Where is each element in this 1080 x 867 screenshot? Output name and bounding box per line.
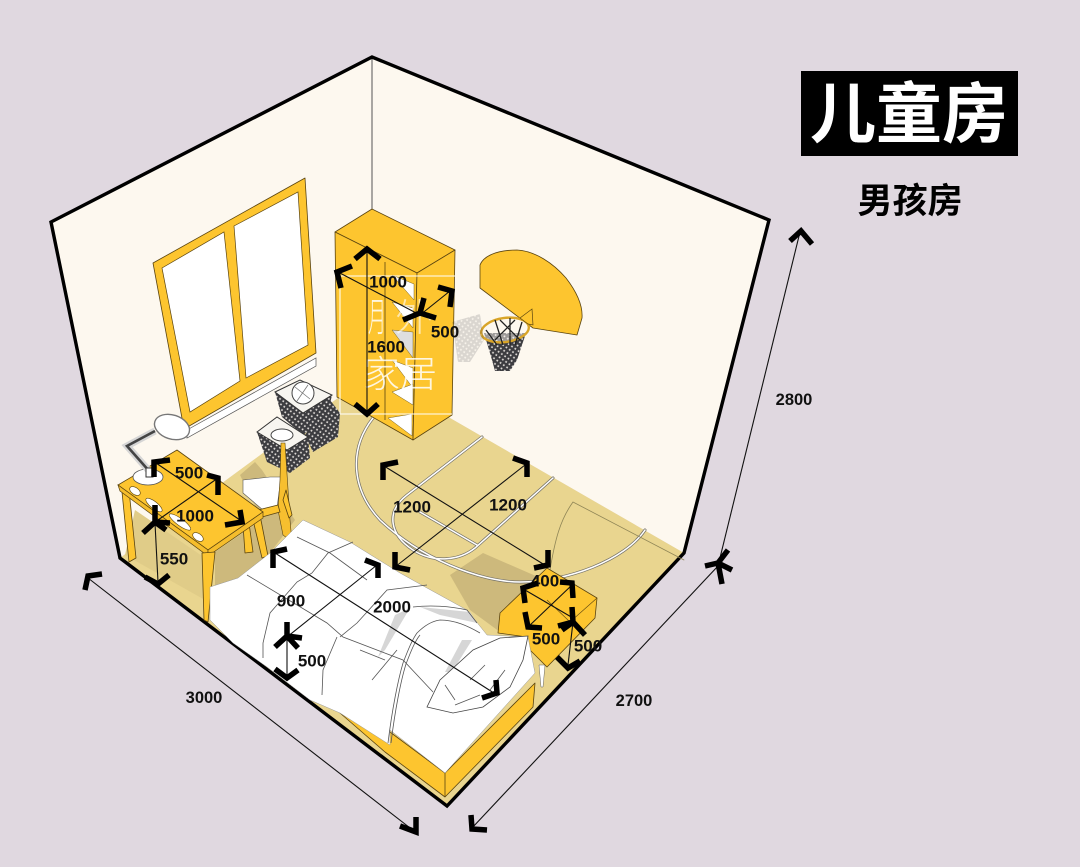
left wall (51, 57, 372, 558)
duvet folds (247, 537, 480, 743)
nightstand (498, 568, 597, 687)
dimension: bed width 900 (277, 560, 378, 637)
dimension: desk width 1000: 1000 (176, 506, 214, 526)
title: 儿童房 (810, 77, 1008, 151)
watermark: 外 (395, 298, 433, 340)
floor court lines (356, 418, 684, 582)
dimension: bed length 2000: 2000 (373, 598, 411, 616)
dimension: wardrobe depth 500 (403, 287, 459, 342)
hoop ghost shadow (452, 314, 484, 362)
dimension: wardrobe depth 500: 500 (431, 322, 459, 342)
icon: desk lamp (127, 410, 193, 485)
floor (120, 373, 684, 806)
dimension: bed height 500 (275, 622, 326, 678)
duvet shadows (378, 607, 477, 672)
dimension: room 2700 (471, 566, 718, 830)
dimension: rug length 1200 (383, 462, 548, 568)
dimension: rug length 1200: 1200 (393, 498, 431, 516)
room back corner line (371, 57, 373, 212)
desk (118, 450, 268, 622)
dimension: nightstand width 400 (525, 572, 573, 628)
dimension: room 2800: 2800 (776, 391, 812, 409)
dimension: bed width 900: 900 (277, 592, 305, 610)
shelves (388, 275, 414, 436)
dimension: nightstand height 500: 500 (574, 636, 602, 656)
watermark: 家居 (363, 354, 437, 395)
pillow (427, 636, 528, 713)
right wall (372, 57, 769, 553)
laundry baskets (257, 380, 340, 473)
dimension: wardrobe height 1600: 1600 (367, 338, 405, 356)
dimension: bed height 500: 500 (298, 652, 326, 670)
dimension: nightstand depth 500 (523, 583, 573, 648)
icon: hoop and net (480, 309, 533, 371)
dimension: bed length 2000 (273, 549, 497, 698)
dimension: desk width 1000 (154, 460, 242, 526)
dimension: rug width 1200 (395, 458, 527, 570)
dimension: room 2800 (705, 231, 812, 584)
bed base (340, 683, 535, 797)
chair (243, 443, 292, 542)
watermark (340, 276, 455, 414)
watermark: 月 (368, 295, 386, 340)
bed (210, 520, 535, 797)
dimension: room 3000 (85, 574, 416, 832)
duvet (210, 520, 535, 773)
dimension: desk depth 500: 500 (175, 464, 203, 482)
dimension: wardrobe height 1600 (355, 248, 405, 414)
subtitle: 男孩房 (857, 182, 963, 221)
dimension: nightstand depth 500: 500 (532, 630, 560, 648)
dimension: desk depth 500 (158, 464, 218, 520)
dimension: wardrobe width 1000 (337, 266, 420, 315)
dimension: desk height 550 (143, 505, 188, 584)
dimension: wardrobe width 1000: 1000 (369, 272, 407, 292)
dimension: desk height 550: 550 (160, 550, 188, 568)
panel: room (51, 57, 769, 806)
wardrobe (335, 209, 455, 440)
desk white cut-outs (128, 485, 205, 543)
dimension: nightstand width 400: 400 (531, 572, 559, 590)
icon: basketball backboard (452, 250, 582, 371)
dimension: room 3000: 3000 (186, 689, 222, 707)
room outline (51, 57, 769, 806)
floor shadows (125, 462, 545, 632)
dimension: rug width 1200: 1200 (489, 496, 527, 514)
dimension: room 2700: 2700 (616, 692, 652, 710)
window (153, 178, 316, 438)
dimension: nightstand height 500 (557, 607, 602, 668)
